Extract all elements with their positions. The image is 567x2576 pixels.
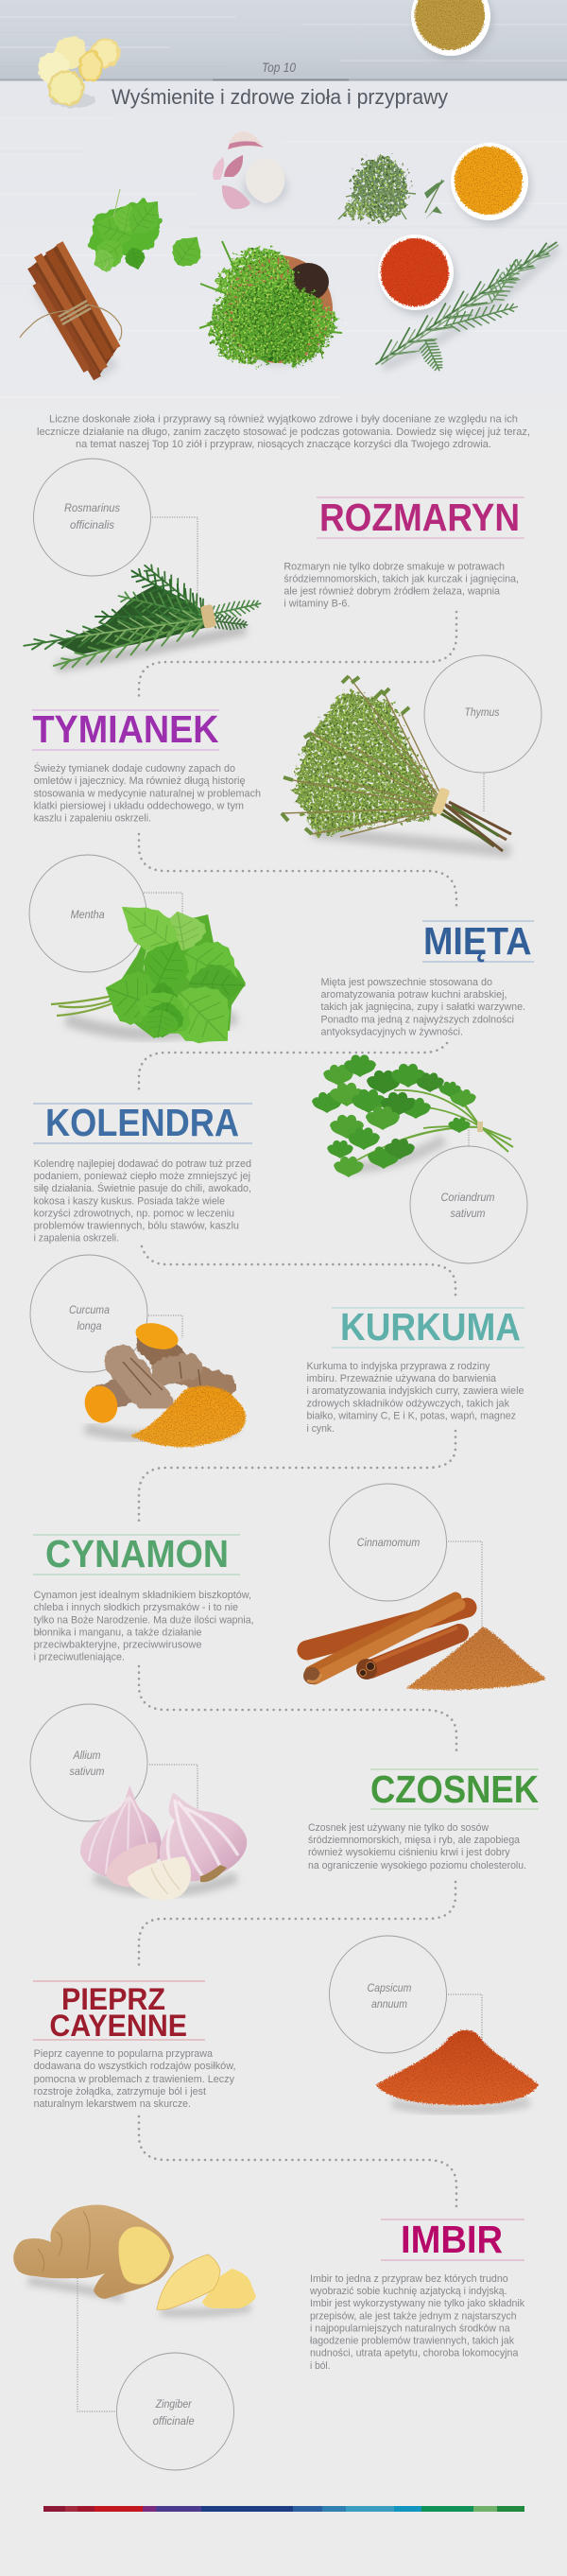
description	[34, 1158, 251, 1244]
description: korzyści zdrowotnych, np. pomoc w leczeniu	[34, 1208, 234, 1219]
description: tylko na Boże Narodzenie. Ma duże ilości wapnia,	[34, 1614, 254, 1626]
heading: Mięta: MIĘTA	[423, 919, 531, 963]
description: ale jest również dobrym źródłem żelaza, wapnia	[284, 586, 500, 598]
image: turmeric roots and powder	[79, 1318, 246, 1447]
title: Top 10	[262, 60, 296, 75]
description	[321, 977, 525, 1038]
description: naturalnym lekarstwem na skurcze.	[34, 2098, 191, 2110]
description: takich jak jagnięcina, zupy i sałatki warzywne.	[321, 1001, 525, 1013]
description: i cynk.	[306, 1423, 335, 1435]
description: i witaminy B-6.	[284, 599, 350, 610]
description: Świeży tymianek dodaje cudowny zapach do	[34, 762, 235, 775]
description: Imbir jest wykorzystywany nie tylko jako składnik	[310, 2298, 525, 2309]
icon: potted thyme	[199, 241, 342, 367]
section: kurkuma	[30, 1255, 524, 1447]
icon: rosemary sprig	[369, 234, 563, 374]
intro text: Liczne doskonałe zioła i przyprawy są również wyjątkowo zdrowe i były doceniane ze względu na ich	[49, 414, 518, 426]
description: wyobrazić sobie kuchnię azjatycką i indyjską.	[309, 2286, 507, 2297]
description: chleba i innych słodkich przysmaków - i to nie	[34, 1602, 238, 1613]
description	[309, 2273, 525, 2372]
section: cynamon	[33, 1484, 546, 1690]
description: łagodzenie problemów trawiennych, takich jak	[310, 2336, 515, 2347]
icon: ginger slices	[38, 36, 120, 108]
label circle: Curcuma longa: longa	[77, 1319, 102, 1332]
label circle: Allium sativum: sativum	[70, 1765, 105, 1778]
description: dodawana do wszystkich rodzajów posiłków,	[34, 2061, 235, 2072]
icon: paprika bowl	[378, 235, 456, 315]
dotted path	[142, 1246, 455, 1297]
section: czosnek	[30, 1704, 539, 1900]
image: garlic bulbs	[80, 1785, 247, 1900]
dotted path	[139, 1431, 455, 1525]
header photo: wooden table with herbs	[0, 0, 567, 444]
label circle: Coriandrum sativum	[410, 1146, 527, 1263]
image: cayenne powder pile	[376, 2030, 539, 2111]
label circle: Capsicum annuum: Capsicum	[367, 1981, 412, 1994]
label circle: Rosmarinus officinalis: Rosmarinus	[64, 501, 120, 514]
title	[112, 60, 449, 109]
dotted path	[139, 834, 456, 911]
label circle: Cinnamomum	[329, 1484, 446, 1601]
image: coriander bunch	[312, 1054, 513, 1177]
heading: Tymianek: TYMIANEK	[32, 707, 219, 751]
icon: lemon balm leaves	[86, 189, 210, 276]
description	[306, 1361, 524, 1435]
connector	[468, 1127, 470, 1146]
label circle: Allium sativum: Allium	[73, 1749, 101, 1762]
description: kaszlu i zapaleniu oskrzeli.	[34, 813, 151, 825]
description: klatki piersiowej i układu oddechowego, w tym	[34, 800, 244, 811]
description: Cynamon jest idealnym składnikiem biszkoptów,	[34, 1590, 251, 1601]
label circle: Capsicum annuum: annuum	[371, 1997, 407, 2010]
heading: Rozmaryn: ROZMARYN	[319, 496, 520, 539]
label circle: Zingiber officinale	[117, 2353, 234, 2470]
heading: Cynamon: CYNAMON	[45, 1532, 229, 1575]
description: błonnika i manganu, a także działanie	[34, 1627, 201, 1638]
label circle: Coriandrum sativum: Coriandrum	[440, 1191, 495, 1204]
description: Kurkuma to indyjska przyprawa z rodziny	[306, 1361, 490, 1372]
label circle: Capsicum annuum	[329, 1936, 446, 2053]
description: Pieprz cayenne to popularna przyprawa	[34, 2048, 213, 2060]
description: kokosa i kaszy kuskus. Posiada także wiele	[34, 1195, 225, 1207]
title: Wyśmienite i zdrowe zioła i przyprawy	[112, 85, 449, 109]
description: aromatyzowania potraw kuchni arabskiej,	[321, 989, 507, 1001]
description: i ból.	[310, 2360, 330, 2372]
connector	[144, 893, 182, 931]
icon: cinnamon stick bundle	[20, 243, 122, 378]
dotted path	[139, 1666, 456, 1756]
description: śródziemnomorskich, takich jak kurczak i jagnięcina,	[284, 573, 519, 584]
image: rosemary bunch	[23, 557, 262, 676]
description: nudności, utrata apetytu, choroba lokomocyjna	[310, 2348, 518, 2359]
connector	[448, 1541, 482, 1628]
description: problemów trawiennych, bólu stawów, kaszlu	[34, 1220, 239, 1231]
description: śródziemnomorskich, mięsa i ryb, ale zapobiega	[308, 1835, 520, 1846]
image: ginger root and slices	[13, 2205, 256, 2313]
description: Rozmaryn nie tylko dobrze smakuje w potrawach	[284, 561, 505, 572]
description	[34, 1590, 254, 1663]
heading: Pieprz cayenne: CAYENNE	[49, 2009, 187, 2043]
description: imbiru. Przeważnie używana do barwienia	[306, 1373, 496, 1384]
icon: curry powder bowl	[411, 0, 493, 61]
description: i najpopularniejszych naturalnych środków na	[310, 2323, 510, 2334]
description	[34, 2048, 235, 2110]
section: mięta	[29, 855, 534, 1062]
description: zdrowych składników odżywczych, takich jak	[306, 1398, 510, 1409]
image: mint bunch	[51, 891, 252, 1062]
label circle: Rosmarinus officinalis	[34, 459, 151, 576]
label circle: Curcuma longa	[30, 1255, 147, 1372]
description: rozstroje żołądka, zatrzymuje ból i jest	[34, 2086, 206, 2097]
section: pieprz cayenne	[33, 1936, 539, 2111]
image: thyme bunch	[282, 676, 511, 851]
section: kolendra	[33, 1054, 527, 1263]
connector	[77, 2278, 115, 2411]
heading: Pieprz cayenne	[33, 1981, 205, 2043]
dotted path	[139, 1043, 447, 1090]
description: przepisów, ale jest także jednym z najstarszych	[310, 2310, 516, 2322]
colour bar footer	[43, 2506, 524, 2512]
heading: Czosnek: CZOSNEK	[370, 1767, 539, 1811]
description: również wysokiemu ciśnieniu krwi i jest dobry	[308, 1847, 510, 1858]
description: przeciwbakteryjne, przeciwwirusowe	[34, 1640, 201, 1651]
connector	[152, 517, 198, 605]
description: stosowania w medycynie naturalnej w problemach	[34, 788, 261, 799]
heading: Imbir: IMBIR	[401, 2218, 503, 2261]
connector	[149, 1765, 198, 1811]
section: rozmaryn	[23, 459, 524, 676]
intro text	[37, 414, 530, 450]
description: omletów i jajecznicy. Ma również długą historię	[34, 775, 245, 787]
description: Imbir to jedna z przypraw bez których trudno	[310, 2273, 508, 2285]
heading: Kurkuma: KURKUMA	[340, 1305, 521, 1349]
description: i zapalenia oskrzeli.	[34, 1233, 119, 1244]
description	[34, 762, 261, 825]
dotted path	[139, 2116, 456, 2212]
description: Ponadto ma jedną z najwyższych zdolności	[321, 1014, 514, 1025]
icon: garlic cloves	[213, 131, 288, 209]
description: podaniem, ponieważ ciepło może zmniejszyć jej	[34, 1171, 250, 1182]
description: na ograniczenie wysokiego poziomu cholesterolu.	[308, 1860, 526, 1871]
icon: turmeric bowl	[451, 143, 531, 225]
connector	[148, 1315, 182, 1338]
description: białko, witaminy C, E i K, potas, wapń, magnez	[306, 1410, 516, 1421]
label circle: Cinnamomum: Cinnamomum	[357, 1536, 420, 1549]
image: cinnamon sticks and powder	[303, 1598, 546, 1690]
heading: Kolendra: KOLENDRA	[45, 1101, 239, 1144]
description: Mięta jest powszechnie stosowana do	[321, 977, 492, 988]
description: i przeciwutleniające.	[34, 1652, 125, 1663]
heading: Pieprz cayenne: PIEPRZ	[61, 1982, 165, 2016]
intro text: lecznicze działanie na długo, zanim zaczęto stosować je podczas gotowania. Dowiedz się więcej już teraz,	[37, 426, 530, 438]
label circle: Mentha	[29, 855, 146, 972]
description: Czosnek jest używany nie tylko do sosów	[308, 1822, 489, 1834]
description: i aromatyzowania indyjskich curry, zawiera wiele	[306, 1385, 524, 1397]
description: Kolendrę najlepiej dodawać do potraw tuż przed	[34, 1158, 251, 1170]
label circle: Thymus: Thymus	[465, 705, 499, 719]
description: siłę działania. Świetnie pasuje do chili, awokado,	[34, 1182, 251, 1194]
description	[284, 561, 519, 610]
icon: thyme sprigs	[338, 156, 444, 221]
section: imbir	[13, 2205, 525, 2470]
section: tymianek	[32, 655, 541, 851]
dotted path	[139, 612, 456, 701]
intro text: na temat naszej Top 10 ziół i przypraw, niosących znaczące korzyści dla Twojego zdrowia.	[76, 439, 491, 450]
connector	[448, 1994, 482, 2043]
dotted path	[139, 1882, 455, 1971]
label circle: Zingiber officinale: Zingiber	[155, 2397, 193, 2411]
label circle: Curcuma longa: Curcuma	[69, 1303, 110, 1316]
label circle: Allium sativum	[30, 1704, 147, 1821]
description: antyoksydacyjnych w żywności.	[321, 1027, 463, 1038]
label circle: Rosmarinus officinalis: officinalis	[70, 518, 114, 531]
description: pomocna w problemach z trawieniem. Leczy	[34, 2074, 235, 2085]
description	[308, 1822, 526, 1871]
label circle: Mentha: Mentha	[71, 908, 105, 921]
connector	[483, 774, 485, 811]
label circle: Coriandrum sativum: sativum	[450, 1207, 486, 1220]
label circle: Zingiber officinale: officinale	[153, 2414, 195, 2428]
label circle: Thymus	[424, 655, 541, 773]
